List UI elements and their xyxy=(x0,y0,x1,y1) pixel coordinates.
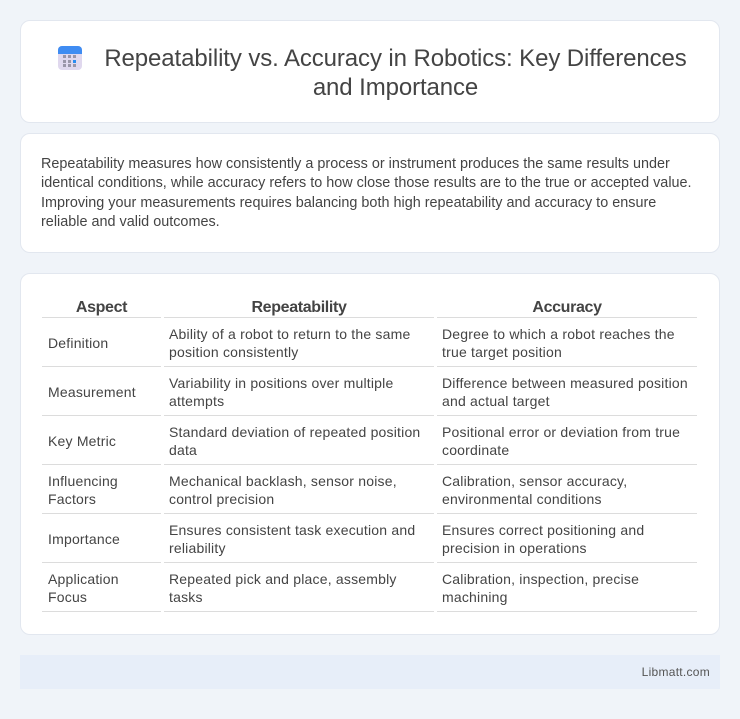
row: definition: position consistently xyxy=(169,344,298,360)
row: measurement: Variability in positions over multiple xyxy=(169,375,393,391)
row: definition: Definition xyxy=(48,335,108,351)
row: application focus: Application xyxy=(48,571,119,587)
row: importance: Ensures correct positioning and xyxy=(442,522,644,538)
row: importance: Importance xyxy=(48,531,120,547)
row: measurement xyxy=(42,375,697,416)
text block: intro: reliable and valid outcomes. xyxy=(41,214,220,230)
heading: title: and Importance xyxy=(313,74,478,101)
row: influencing factors: Influencing xyxy=(48,473,118,489)
row: application focus: tasks xyxy=(169,589,203,605)
row: key metric: Key Metric xyxy=(48,433,116,449)
footer text: Libmatt.com xyxy=(642,665,710,679)
text block: intro: Repeatability measures how consistently a process or instrument produces the same results under xyxy=(41,156,670,172)
icon: calendar xyxy=(58,46,82,70)
table header: Repeatability xyxy=(251,299,347,316)
row: importance: precision in operations xyxy=(442,540,587,556)
table header: Accuracy xyxy=(532,299,602,316)
row: key metric: data xyxy=(169,442,197,458)
row: definition: Degree to which a robot reaches the xyxy=(442,326,675,342)
row: key metric: coordinate xyxy=(442,442,509,458)
row: definition: Ability of a robot to return to the same xyxy=(169,326,410,342)
row: importance: Ensures consistent task execution and xyxy=(169,522,415,538)
panel: intro card xyxy=(20,133,720,253)
row: application focus: Repeated pick and place, assembly xyxy=(169,571,397,587)
row: measurement: Measurement xyxy=(48,384,136,400)
row: importance xyxy=(42,522,697,563)
row: influencing factors: Calibration, sensor accuracy, xyxy=(442,473,627,489)
row: key metric xyxy=(42,424,697,465)
row: influencing factors: Factors xyxy=(48,491,96,507)
heading: title xyxy=(104,45,687,101)
row: measurement: and actual target xyxy=(442,393,550,409)
row: importance: reliability xyxy=(169,540,226,556)
row: measurement: Difference between measured position xyxy=(442,375,688,391)
row: key metric: Standard deviation of repeated position xyxy=(169,424,420,440)
panel: comparison table card xyxy=(20,273,720,635)
row: application focus: Focus xyxy=(48,589,87,605)
text block: intro: identical conditions, while accuracy refers to how close those results are to the true or accepted value. xyxy=(41,175,692,191)
row: application focus: Calibration, inspection, precise xyxy=(442,571,639,587)
row: application focus xyxy=(42,571,697,612)
row: application focus: machining xyxy=(442,589,508,605)
row: definition: true target position xyxy=(442,344,562,360)
table header: Aspect xyxy=(76,299,127,316)
heading: title: Repeatability vs. Accuracy in Robotics: Key Differences xyxy=(104,45,687,72)
row: influencing factors: environmental conditions xyxy=(442,491,602,507)
panel: title card xyxy=(20,20,720,123)
table header xyxy=(42,299,697,318)
row: key metric: Positional error or deviation from true xyxy=(442,424,680,440)
text block: intro: Improving your measurements requires balancing both high repeatability and accuracy to ensure xyxy=(41,194,656,210)
row: influencing factors: Mechanical backlash, sensor noise, xyxy=(169,473,397,489)
text block: intro xyxy=(41,156,692,230)
row: definition xyxy=(42,326,697,367)
row: influencing factors xyxy=(42,473,697,514)
row: measurement: attempts xyxy=(169,393,224,409)
footer bar xyxy=(20,655,720,689)
row: influencing factors: control precision xyxy=(169,491,274,507)
